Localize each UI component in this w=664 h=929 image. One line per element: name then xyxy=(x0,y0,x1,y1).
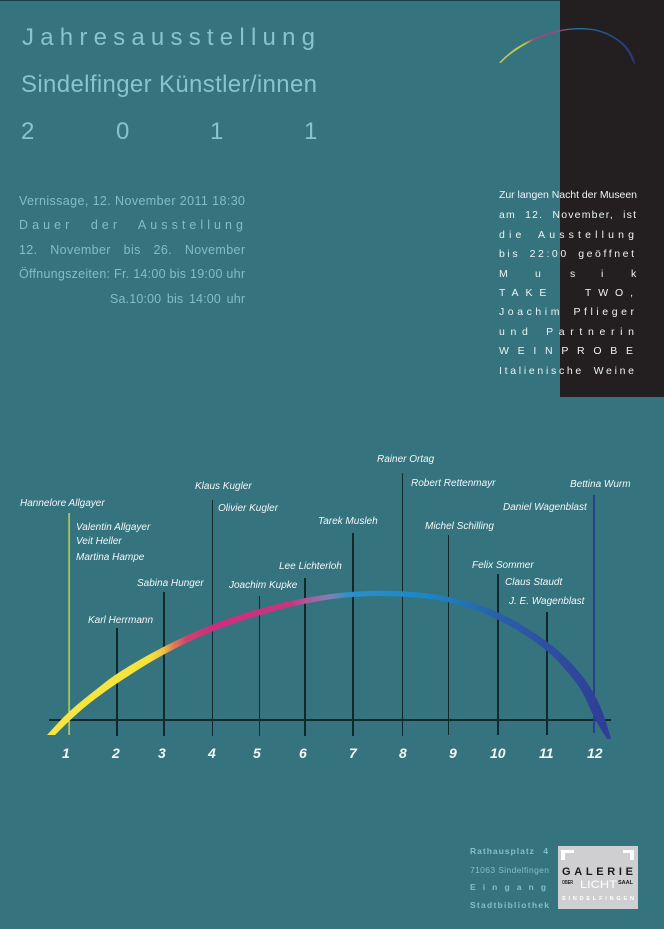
artist names xyxy=(20,454,631,626)
axis numbers: 5 xyxy=(253,745,261,761)
black panel xyxy=(560,0,664,397)
artist names: Felix Sommer xyxy=(472,560,534,571)
artist names: J. E. Wagenblast xyxy=(508,596,586,607)
axis numbers: 12 xyxy=(587,745,603,761)
artist names: Rainer Ortag xyxy=(377,454,435,465)
axis numbers: 9 xyxy=(449,745,457,761)
axis numbers xyxy=(62,745,603,761)
artist names: Michel Schilling xyxy=(425,521,494,532)
artist names: Sabina Hunger xyxy=(137,578,204,589)
gallery logo: SINDELFINGEN xyxy=(562,896,634,902)
museum night text: Joachim Pflieger xyxy=(499,306,634,318)
artist names: Daniel Wagenblast xyxy=(503,502,588,513)
gallery logo: OBER xyxy=(562,880,573,886)
artist names: Valentin Allgayer xyxy=(76,522,151,533)
gallery logo: LICHT xyxy=(580,879,617,891)
address: Stadtbibliothek xyxy=(470,900,549,910)
museum night text: am 12. November, ist xyxy=(499,209,636,221)
address xyxy=(470,846,549,910)
gallery logo: SAAL xyxy=(618,880,633,886)
vertical markers xyxy=(68,473,595,736)
artist names: Robert Rettenmayr xyxy=(411,478,496,489)
address: Rathausplatz 4 xyxy=(470,846,548,856)
exhibition dates: Sa.10:00 bis 14:00 uhr xyxy=(110,292,245,306)
axis numbers: 4 xyxy=(207,745,216,761)
museum night text: s xyxy=(570,268,575,280)
axis numbers: 8 xyxy=(399,745,407,761)
title: Sindelfinger Künstler/innen xyxy=(21,71,317,98)
artist names: Joachim Kupke xyxy=(228,580,298,591)
museum night text xyxy=(499,189,637,377)
artist names: Lee Lichterloh xyxy=(279,561,342,572)
small arc logo xyxy=(499,28,635,64)
artist names: Veit Heller xyxy=(76,536,122,547)
artist names: Bettina Wurm xyxy=(570,479,631,490)
axis numbers: 6 xyxy=(299,745,307,761)
gallery logo: GALERIE xyxy=(562,866,633,878)
artist names: Martina Hampe xyxy=(76,552,145,563)
artist names: Tarek Musleh xyxy=(318,516,378,527)
title: 1 xyxy=(210,118,223,145)
axis numbers: 10 xyxy=(490,745,506,761)
artist names: Hannelore Allgayer xyxy=(20,498,105,509)
museum night text: TAKE TWO, xyxy=(499,287,633,299)
address: 71063 Sindelfingen xyxy=(470,865,549,875)
museum night text: M xyxy=(499,268,508,280)
title xyxy=(21,24,317,145)
museum night text: Zur langen Nacht der Museen xyxy=(499,189,637,201)
timeline chart xyxy=(20,454,631,761)
axis numbers: 7 xyxy=(349,745,358,761)
museum night text: i xyxy=(601,268,603,280)
gallery logo xyxy=(558,846,638,909)
artist names: Klaus Kugler xyxy=(195,481,252,492)
title: 0 xyxy=(116,118,129,145)
artist names: Karl Herrmann xyxy=(88,615,153,626)
museum night text: u xyxy=(535,268,541,280)
axis xyxy=(49,719,611,721)
exhibition dates: Dauer der Ausstellung xyxy=(19,218,243,232)
museum night text: und Partnerin xyxy=(499,326,634,338)
artist names: Olivier Kugler xyxy=(218,503,279,514)
exhibition dates: Vernissage, 12. November 2011 18:30 xyxy=(19,194,245,208)
exhibition dates xyxy=(19,194,245,306)
rainbow arc xyxy=(47,591,611,739)
museum night text: Italienische Weine xyxy=(499,365,634,377)
address: Eingang xyxy=(470,882,546,892)
exhibition dates: Öffnungszeiten: Fr. 14:00 bis 19:00 uhr xyxy=(19,267,245,281)
museum night text: WEINPROBE xyxy=(499,345,633,357)
museum night text: k xyxy=(631,268,637,280)
artist names: Claus Staudt xyxy=(505,577,563,588)
title: Jahresausstellung xyxy=(22,24,315,51)
axis numbers: 3 xyxy=(158,745,166,761)
axis numbers: 2 xyxy=(111,745,120,761)
museum night text: die Ausstellung xyxy=(499,229,634,241)
title: 1 xyxy=(304,118,317,145)
title: 2 xyxy=(21,118,34,145)
museum night text: bis 22:00 geöffnet xyxy=(499,248,634,260)
axis numbers: 1 xyxy=(62,745,70,761)
exhibition dates: 12. November bis 26. November xyxy=(19,243,245,257)
axis numbers: 11 xyxy=(539,745,554,761)
